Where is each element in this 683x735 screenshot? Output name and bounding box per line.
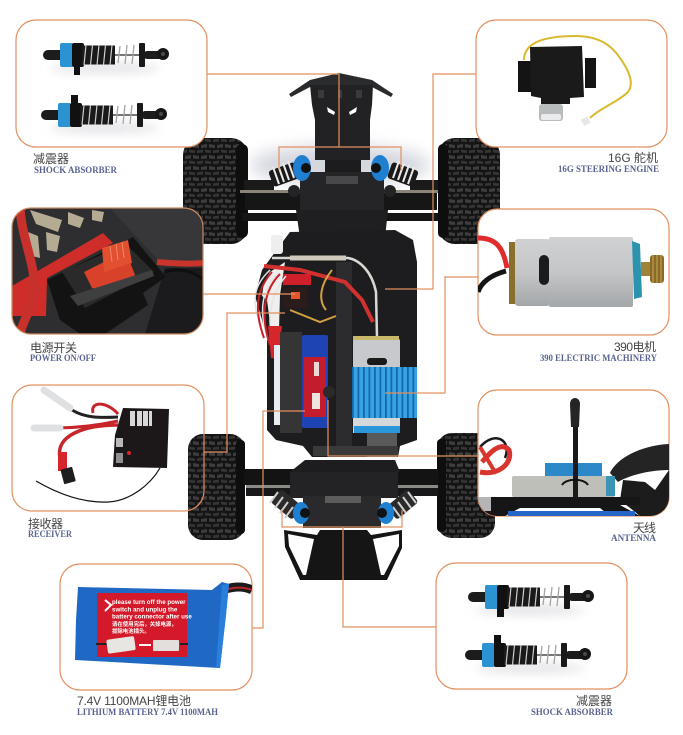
icon: antenna on car (478, 398, 669, 516)
icon: shock pair (465, 585, 594, 673)
battery warning text: switch and unplug the (112, 606, 178, 614)
front right shock spring (371, 155, 419, 187)
front wing and nose (289, 73, 393, 160)
icon: shock pair (41, 43, 169, 133)
front left tire (183, 138, 248, 244)
front axle arms (240, 160, 438, 256)
front right tire (438, 138, 500, 244)
label: 16G steering engine (558, 150, 659, 174)
label: shock absorber top left (33, 152, 117, 175)
label: shock absorber bottom right: 减震器 (576, 694, 612, 708)
panel: 390 electric machinery (478, 209, 669, 335)
label: 390 electric machinery (540, 340, 657, 363)
rear left shock spring (270, 489, 310, 524)
orange slider (84, 262, 135, 288)
motor in car (352, 336, 417, 433)
panel: shock absorber (top left) (16, 20, 207, 147)
label: antenna: ANTENNA (611, 533, 656, 543)
icon: receiver module (34, 390, 169, 502)
switch housing (47, 237, 166, 334)
panel: lithium battery (60, 564, 252, 690)
label: lithium battery (77, 693, 218, 717)
panel: 16G steering engine (476, 20, 667, 147)
car shadow (250, 145, 430, 185)
heat sink pins (28, 210, 104, 258)
rear axle and bumper (244, 460, 438, 580)
right red wire (157, 262, 204, 264)
rear right shock spring (377, 489, 419, 524)
panel: power switch (12, 208, 204, 334)
front left shock spring (268, 155, 311, 187)
label: 16G steering engine: 16G 舵机 (608, 150, 658, 165)
label: receiver (28, 516, 72, 539)
chassis tub (255, 230, 417, 457)
battery warning text: please turn off the power (112, 599, 186, 606)
label: lithium battery: LITHIUM BATTERY 7.4V 1100MAH (77, 707, 218, 717)
label: antenna: 天线 (633, 521, 656, 535)
label: power on/off (30, 341, 96, 363)
red circuit board (12, 233, 113, 316)
left red wire (20, 208, 34, 334)
rear left tire (188, 434, 245, 540)
battery in car (274, 332, 335, 433)
panel: antenna (478, 390, 669, 516)
icon: servo (518, 36, 631, 126)
electronics and wires (255, 235, 377, 359)
icon: battery pack (75, 582, 252, 668)
label: lithium battery: 7.4V 1100MAH锂电池 (77, 693, 191, 708)
leader lines (203, 74, 478, 628)
rear right tire (437, 433, 495, 538)
panel: shock absorber (bottom right) (436, 563, 627, 689)
battery warning text: battery connector after use (112, 614, 192, 620)
label: 390 electric machinery: 390电机 (614, 340, 656, 354)
label: shock absorber top left: SHOCK ABSORBER (34, 165, 117, 175)
label: power on/off: POWER ON/OFF (30, 353, 96, 363)
label: shock absorber bottom right: SHOCK ABSORBER (531, 707, 613, 717)
label: power on/off: 电源开关 (30, 341, 77, 355)
label: receiver: 接收器 (28, 516, 63, 531)
car chassis photo (183, 73, 500, 580)
label: receiver: RECEIVER (28, 529, 72, 539)
label: shock absorber bottom right (531, 694, 613, 717)
icon: battery pack: 拔除电池插头。 (112, 627, 150, 635)
panel: receiver (12, 385, 204, 511)
label: shock absorber top left: 减震器 (33, 152, 69, 166)
icon: battery pack: 请在使用完后，关掉电源， (112, 620, 177, 628)
label: 16G steering engine: 16G STEERING ENGINE (558, 164, 659, 174)
label: antenna (611, 521, 656, 543)
icon: motor (478, 237, 664, 307)
label: 390 electric machinery: 390 ELECTRIC MACHINERY (540, 353, 657, 363)
